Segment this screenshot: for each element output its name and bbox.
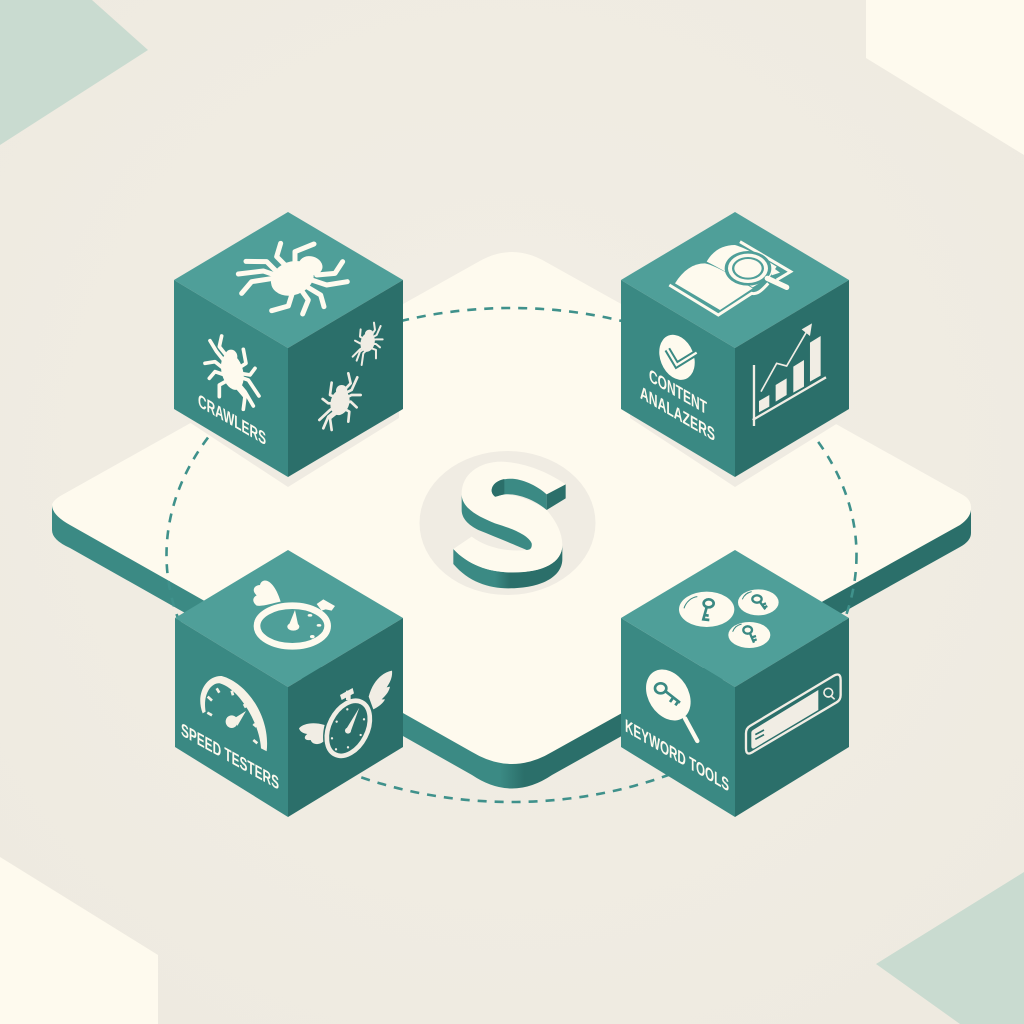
dashed orbit xyxy=(166,308,856,802)
S diagonal wall xyxy=(462,495,532,550)
cube: keyword tools xyxy=(621,550,849,817)
label: content: CONTENT xyxy=(649,365,707,419)
cube: content analyzers xyxy=(621,212,849,477)
icon: speedometer xyxy=(200,676,267,751)
cube shadows xyxy=(183,400,846,487)
label: crawlers: CRAWLERS xyxy=(198,390,266,450)
icon: small spider upper right face xyxy=(353,323,383,365)
S lower wall xyxy=(453,545,562,588)
corner shape: top right xyxy=(866,0,1024,155)
cube: speed testers xyxy=(175,550,403,817)
corner shape: top left xyxy=(0,0,148,145)
cube: crawlers xyxy=(174,212,403,477)
platform side xyxy=(52,505,971,788)
bubble: upper key xyxy=(738,589,779,615)
S terminal end xyxy=(547,484,566,510)
corner shape: bottom left xyxy=(0,857,158,1024)
cube faces xyxy=(174,212,403,477)
label: keyword tools: KEYWORD TOOLS xyxy=(625,715,729,796)
corner shape: bottom right xyxy=(876,872,1024,1024)
S inner wall xyxy=(492,479,547,510)
bubble: large key xyxy=(679,592,734,627)
platform xyxy=(52,252,971,788)
icon: large spider on top xyxy=(238,243,347,314)
icon: open book with magnifier xyxy=(669,242,791,315)
logo disc xyxy=(420,451,596,595)
icon: spider on left face xyxy=(205,336,259,409)
icon: growth chart xyxy=(753,323,826,426)
label: speed testers: SPEED TESTERS xyxy=(181,719,279,795)
cube faces xyxy=(175,550,403,817)
icon: check badge xyxy=(653,329,701,385)
cube faces xyxy=(621,550,849,817)
center logo xyxy=(420,451,596,595)
icon: search bar xyxy=(746,675,841,754)
icon: winged stopwatch on right face xyxy=(299,671,392,763)
icon: key magnifier xyxy=(637,661,700,741)
label: analazers: ANALAZERS xyxy=(640,382,715,446)
cube faces xyxy=(621,212,849,477)
S inner wall shade xyxy=(492,479,504,497)
icon: key bubbles on top xyxy=(679,589,779,648)
S letter xyxy=(453,462,566,588)
S face xyxy=(453,462,566,572)
icon: winged stopwatch on top xyxy=(253,580,335,646)
bubble: lower key xyxy=(728,622,770,648)
icon: small spider lower right face xyxy=(319,373,361,430)
platform top xyxy=(52,252,971,764)
